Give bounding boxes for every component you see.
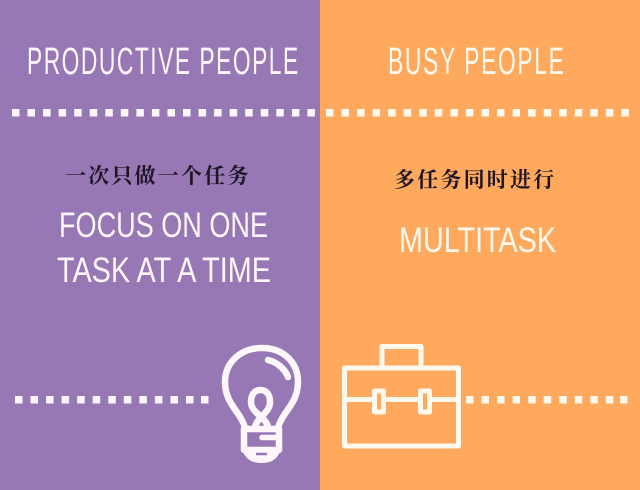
top dotted divider: left: [12, 109, 315, 116]
chinese caption: left: 一次只做一个任务: [65, 164, 251, 188]
text: focus on one task at a time: FOCUS ON ONE: [59, 206, 268, 245]
chinese caption: right: 多任务同时进行: [394, 168, 556, 192]
text: focus on one task at a time: TASK AT A TIME: [57, 251, 271, 290]
icon: briefcase: [344, 346, 458, 446]
heading: productive people: PRODUCTIVE PEOPLE: [27, 40, 298, 82]
panel: productive people: [0, 0, 320, 490]
clasp: right: [420, 391, 430, 412]
text: focus on one task at a time: [57, 206, 271, 290]
top dotted divider: right: [326, 109, 629, 116]
clasp: left: [374, 391, 384, 412]
bottom dotted line: right: [466, 396, 628, 404]
icon: light bulb: [225, 348, 298, 460]
heading: busy people: BUSY PEOPLE: [388, 40, 564, 82]
panel: busy people: [320, 0, 640, 490]
text: multitask: MULTITASK: [399, 221, 556, 260]
bottom dotted line: left: [15, 396, 208, 404]
